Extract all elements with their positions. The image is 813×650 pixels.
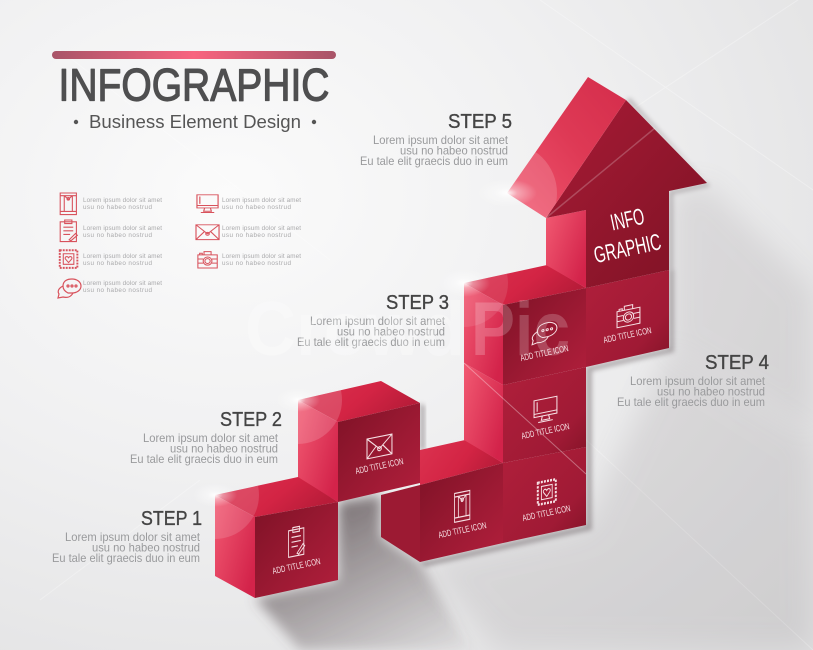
legend item: camera: usu no habeo nostrud — [222, 260, 291, 267]
legend item: envelope — [60, 193, 162, 215]
legend item: monitor — [197, 195, 301, 212]
cube labels: ADD TITLE ICON — [354, 456, 404, 476]
legend item: clipboard: usu no habeo nostrud — [83, 232, 152, 239]
camera block — [586, 270, 669, 367]
legend item: mail — [196, 225, 301, 240]
icon: stamp — [538, 479, 556, 505]
arrow title: INFO — [608, 203, 647, 235]
arrow title: GRAPHIC — [591, 228, 663, 268]
legend item: chat: Lorem ipsum dolor sit amet — [83, 280, 162, 287]
icon: mail — [367, 434, 392, 459]
title: INFOGRAPHIC — [58, 60, 330, 110]
legend item: stamp: Lorem ipsum dolor sit amet — [83, 253, 162, 260]
icon: chat — [532, 321, 557, 345]
arrow title — [591, 203, 663, 268]
step 3 text: Eu tale elit graecis duo in eum — [297, 335, 445, 349]
title bar — [52, 51, 336, 59]
glare highlights — [171, 128, 655, 539]
legend item: chat — [58, 279, 162, 298]
step 4 text: usu no habeo nostrud — [657, 384, 765, 398]
lower middle block — [381, 440, 503, 562]
cube labels: ADD TITLE ICON — [271, 556, 321, 576]
legend item: monitor: Lorem ipsum dolor sit amet — [222, 197, 301, 204]
cube labels: ADD TITLE ICON — [602, 325, 652, 345]
long cast shadows — [255, 98, 813, 650]
legend item: stamp — [60, 250, 162, 268]
icon: monitor — [534, 396, 557, 423]
legend item: stamp: usu no habeo nostrud — [83, 260, 152, 267]
cube icons — [289, 303, 640, 557]
icon: clipboard — [289, 525, 305, 557]
step 2 text: Eu tale elit graecis duo in eum — [130, 452, 278, 466]
step 2 text: STEP 2 — [220, 409, 282, 431]
watermark: Crowd — [245, 287, 465, 372]
watermark: Pic — [471, 287, 570, 372]
cube labels: ADD TITLE ICON — [520, 421, 570, 441]
step 5 text: STEP 5 — [448, 111, 512, 133]
legend item: chat: usu no habeo nostrud — [83, 287, 152, 294]
step 4 text: STEP 4 — [705, 352, 769, 374]
legend item: mail: Lorem ipsum dolor sit amet — [222, 225, 301, 232]
step 4 text: Eu tale elit graecis duo in eum — [617, 395, 765, 409]
step 3 text — [297, 292, 449, 349]
cube labels: ADD TITLE ICON — [437, 520, 487, 540]
column block chat — [464, 265, 586, 385]
cube 2 — [298, 381, 420, 502]
step 3 text: Lorem ipsum dolor sit amet — [310, 314, 446, 328]
step 4 text: Lorem ipsum dolor sit amet — [630, 374, 766, 388]
step 5 text: Eu tale elit graecis duo in eum — [360, 154, 508, 168]
step 3 text: STEP 3 — [386, 292, 449, 314]
step 4 text — [617, 352, 769, 409]
step 1 text: usu no habeo nostrud — [92, 540, 200, 554]
step 5 text — [360, 111, 512, 168]
lower right block — [503, 447, 586, 543]
legend item: monitor: usu no habeo nostrud — [222, 204, 291, 211]
legend item: clipboard — [60, 220, 162, 242]
step 3 text: usu no habeo nostrud — [337, 324, 445, 338]
step 5 text: Lorem ipsum dolor sit amet — [373, 133, 509, 147]
step 2 text: usu no habeo nostrud — [170, 442, 278, 456]
cube labels: ADD TITLE ICON — [519, 343, 569, 363]
step 2 text — [130, 409, 282, 466]
step 5 text: usu no habeo nostrud — [400, 144, 508, 158]
step 1 text: STEP 1 — [141, 508, 202, 530]
icon: envelope — [455, 490, 470, 522]
column block monitor — [464, 363, 586, 463]
step 1 text: Lorem ipsum dolor sit amet — [65, 530, 201, 544]
legend item: envelope: usu no habeo nostrud — [83, 204, 152, 211]
cube labels — [271, 325, 652, 576]
icon: camera — [617, 303, 640, 328]
cube labels: ADD TITLE ICON — [521, 503, 571, 523]
step 2 text: Lorem ipsum dolor sit amet — [143, 431, 279, 445]
legend item: camera — [198, 252, 301, 268]
step 1 text: Eu tale elit graecis duo in eum — [52, 551, 200, 565]
legend — [58, 193, 301, 298]
legend item: camera: Lorem ipsum dolor sit amet — [222, 253, 301, 260]
legend item: mail: usu no habeo nostrud — [222, 232, 291, 239]
step 1 text — [52, 508, 202, 565]
subtitle: Business Element Design — [89, 112, 301, 132]
arrow graphic — [215, 77, 707, 598]
cube 1 — [215, 477, 338, 598]
arrow stem and head — [507, 77, 707, 288]
legend item: clipboard: Lorem ipsum dolor sit amet — [83, 225, 162, 232]
legend item: envelope: Lorem ipsum dolor sit amet — [83, 197, 162, 204]
